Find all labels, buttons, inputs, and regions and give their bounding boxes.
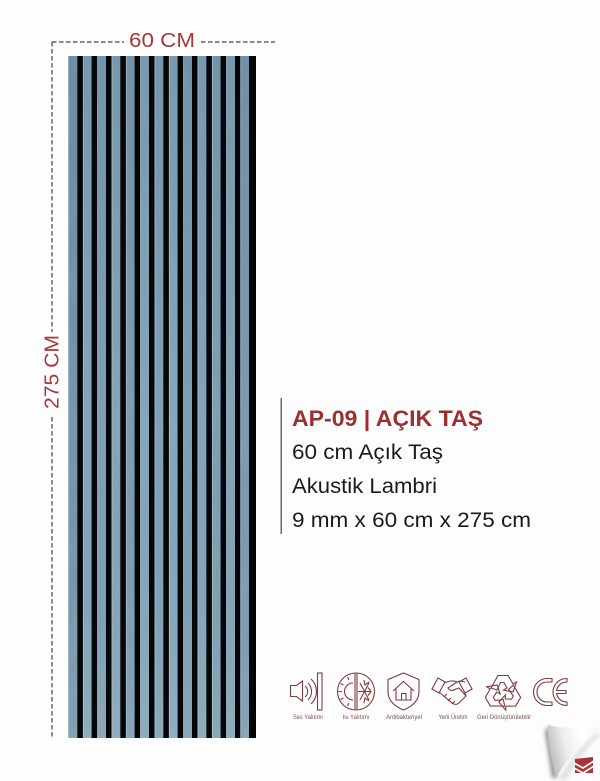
product type: Akustik Lambri: [292, 475, 437, 498]
icon: CE mark: [534, 678, 567, 706]
acoustic slat panel: [68, 56, 256, 738]
icon: sound insulation: [290, 673, 323, 721]
width dimension: 60 CM: 60 CM: [129, 30, 195, 52]
icon: heat insulation: [338, 673, 374, 721]
logo: [574, 757, 594, 773]
icon: antibacterial shield: Antibakteriyel: [386, 715, 422, 721]
icon: antibacterial shield: [386, 673, 422, 721]
product dimensions: 9 mm x 60 cm x 275 cm: [292, 509, 531, 532]
icon: recyclable: Geri Dönüştürülebilir: [477, 715, 531, 721]
product size and colour: 60 cm Açık Taş: [292, 441, 443, 464]
product info block: [280, 398, 531, 534]
icon: local production handshake: Yerli Üretim: [438, 714, 468, 721]
height dimension: 275 CM: 275 CM: [40, 335, 64, 409]
icon: local production handshake: [432, 678, 472, 721]
page curl corner with logo: [545, 725, 600, 781]
icon: recyclable: [477, 676, 531, 721]
icon: sound insulation: Ses Yalıtımı: [293, 715, 323, 721]
product title: AP-09 | AÇIK TAŞ: [292, 406, 483, 431]
icon: heat insulation: Isı Yalıtımı: [342, 715, 370, 721]
